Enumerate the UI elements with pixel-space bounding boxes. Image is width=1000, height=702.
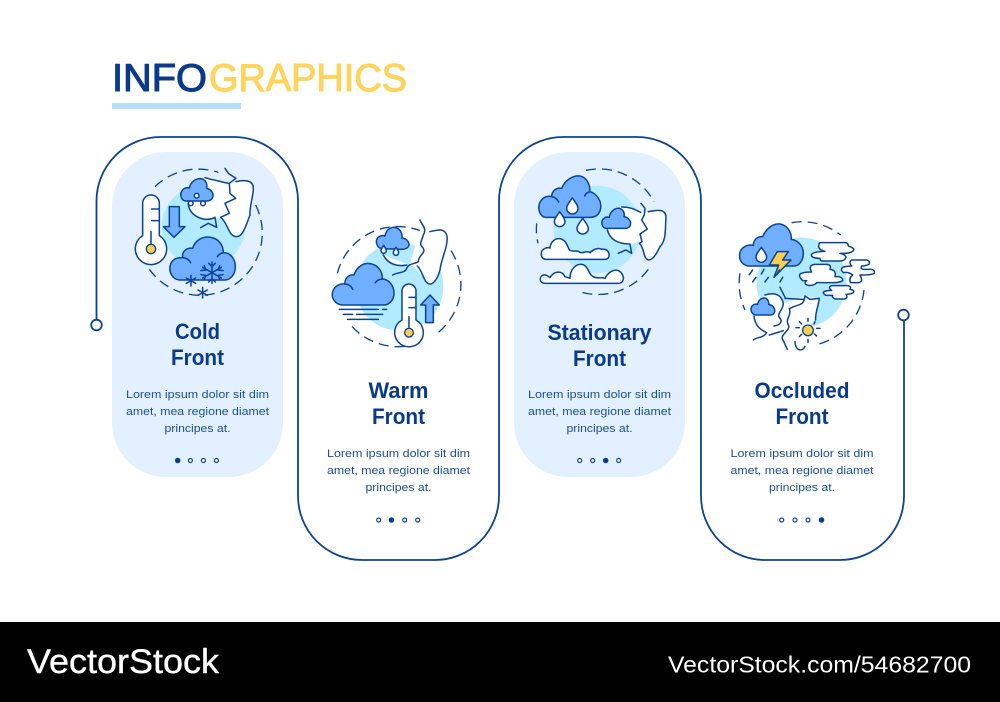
text block: stationary front	[528, 389, 672, 435]
pagination dots: occluded front	[780, 518, 824, 522]
text block: occluded front	[730, 448, 874, 494]
text block: cold front: amet, mea regione diamet	[126, 406, 270, 418]
heading: stationary front: Stationary	[548, 320, 652, 345]
text block: warm front: Lorem ipsum dolor sit dim	[327, 448, 470, 460]
title: GRAPHICS	[209, 57, 407, 100]
heading: cold front: Front	[171, 345, 225, 370]
panel background: cold front	[112, 152, 283, 477]
text block: stationary front: amet, mea regione diamet	[528, 406, 672, 418]
heading: stationary front: Front	[573, 346, 627, 371]
text block: warm front	[327, 448, 471, 494]
icon: cold front	[135, 168, 262, 298]
panel: occluded front	[730, 222, 875, 522]
icon: warm front	[332, 220, 461, 347]
panel: warm front	[327, 220, 471, 522]
heading: occluded front: Front	[776, 404, 829, 429]
heading: occluded front: Occluded	[754, 378, 850, 403]
pagination dots: cold front	[176, 458, 218, 463]
connector outline	[91, 137, 909, 560]
title: INFO	[112, 57, 207, 100]
icon: occluded front	[739, 222, 875, 350]
title	[112, 57, 407, 109]
text block: cold front: Lorem ipsum dolor sit dim	[126, 389, 269, 401]
icon: stationary front	[536, 169, 666, 295]
heading: cold front	[171, 319, 225, 370]
heading: warm front: Front	[372, 404, 426, 429]
footer url: VectorStock.com/54682700	[668, 652, 971, 678]
text block: warm front: amet, mea regione diamet	[327, 465, 471, 477]
panel: stationary front	[528, 169, 672, 463]
pagination dots: stationary front	[578, 458, 621, 463]
heading: cold front: Cold	[175, 319, 220, 344]
panel background: stationary front	[514, 152, 685, 477]
panel: cold front	[126, 168, 270, 463]
footer bar	[0, 622, 1000, 702]
heading: warm front	[368, 378, 428, 429]
pagination dots: warm front	[377, 518, 420, 522]
text block: occluded front: Lorem ipsum dolor sit dim	[730, 448, 874, 460]
footer logo text: VectorStock	[27, 643, 220, 681]
text block: occluded front: amet, mea regione diamet	[730, 465, 874, 477]
heading: occluded front	[754, 378, 850, 429]
text block: cold front: principes at.	[164, 423, 230, 435]
text block: cold front	[126, 389, 270, 435]
text block: stationary front: Lorem ipsum dolor sit dim	[528, 389, 671, 401]
text block: occluded front: principes at.	[769, 482, 835, 494]
text block: stationary front: principes at.	[566, 423, 632, 435]
heading: stationary front	[548, 320, 652, 371]
text block: warm front: principes at.	[366, 482, 432, 494]
heading: warm front: Warm	[368, 378, 428, 403]
